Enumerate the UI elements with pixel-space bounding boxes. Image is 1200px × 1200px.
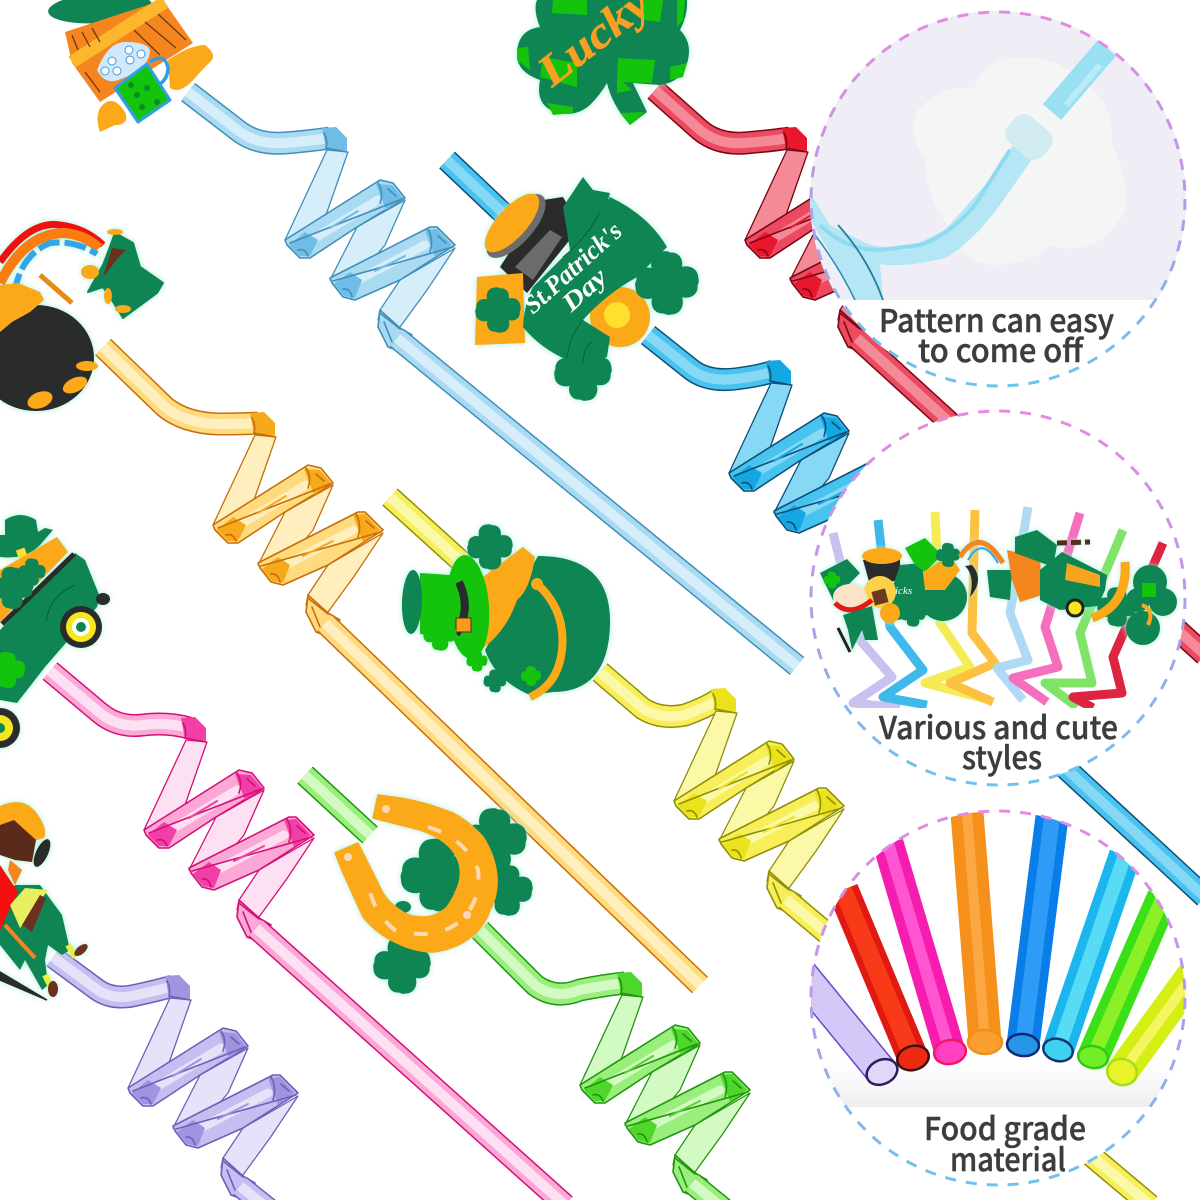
charm: hat and green pot	[401, 524, 610, 697]
charm: barrel and beer mug	[47, 0, 213, 132]
mini straw lineup	[833, 507, 1163, 708]
charm: horseshoe and clovers	[335, 795, 533, 994]
charm: St. Patrick's Day banner	[475, 177, 699, 401]
straw: red	[655, 90, 1200, 655]
mini charm lineup	[820, 530, 1177, 652]
panel: various and cute styles	[811, 411, 1185, 785]
panel: pattern can easy to come off	[810, 10, 1186, 388]
detail photo: flower charm and straw	[810, 11, 1186, 352]
caption: Pattern can easy	[879, 296, 1114, 342]
label: St. Patrick's Day: St.Patrick's	[518, 216, 628, 319]
caption: to come off	[918, 326, 1085, 372]
dashed border	[811, 411, 1185, 785]
caption: Various and cute	[878, 703, 1118, 749]
charm: green truck	[0, 515, 110, 748]
charm: pot of gold and rainbow	[0, 224, 163, 412]
label: St. Patrick's Day: Day	[555, 262, 613, 318]
dashed border	[811, 811, 1185, 1185]
panel: food grade material	[800, 811, 1200, 1197]
dashed border	[811, 12, 1185, 386]
straw: orange	[40, 275, 700, 985]
straw: sky blue	[188, 92, 797, 666]
straw: blue	[447, 160, 1200, 897]
charm: leprechaun	[0, 802, 90, 1000]
caption: styles	[962, 733, 1042, 779]
straw: pink	[50, 671, 565, 1200]
charm: Lucky shamrock	[517, 0, 689, 125]
caption: material	[950, 1135, 1066, 1181]
mini label: icks	[895, 585, 912, 597]
straw: purple	[53, 957, 298, 1200]
straw: green	[305, 775, 750, 1200]
colored straw tubes photo	[811, 812, 1185, 1164]
straw: yellow	[390, 497, 1150, 1200]
caption: Food grade	[924, 1104, 1086, 1150]
